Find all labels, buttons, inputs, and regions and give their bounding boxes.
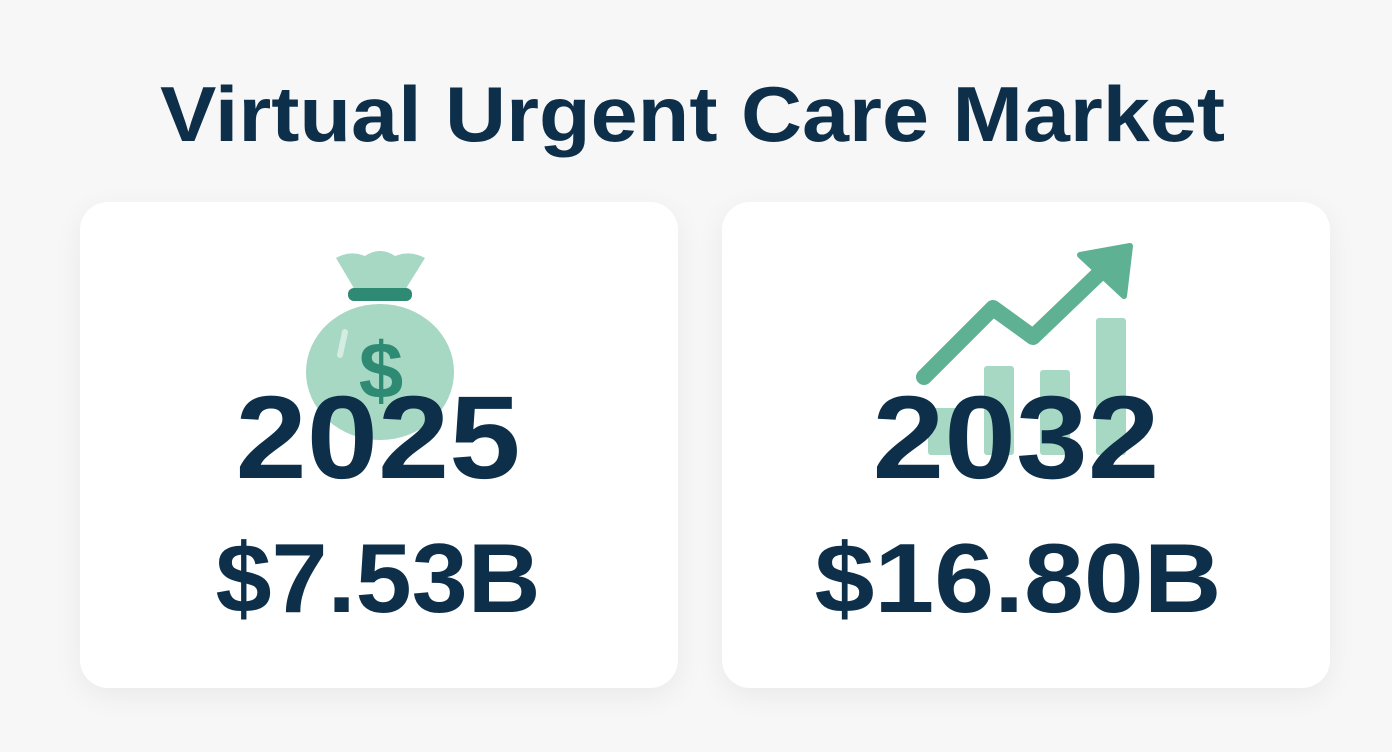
panel: 2025 card xyxy=(80,202,678,688)
text: 2025: 2025 xyxy=(236,372,520,504)
title: Virtual Urgent Care Market xyxy=(160,70,1225,158)
panel: 2032 card xyxy=(722,202,1330,688)
icon: money bag xyxy=(306,251,454,440)
icon: money bag: $ xyxy=(359,326,403,415)
text: 2032: 2032 xyxy=(872,372,1160,504)
text: $7.53B: $7.53B xyxy=(216,523,540,633)
icon: growth chart xyxy=(924,246,1130,455)
text: $16.80B: $16.80B xyxy=(814,523,1222,633)
